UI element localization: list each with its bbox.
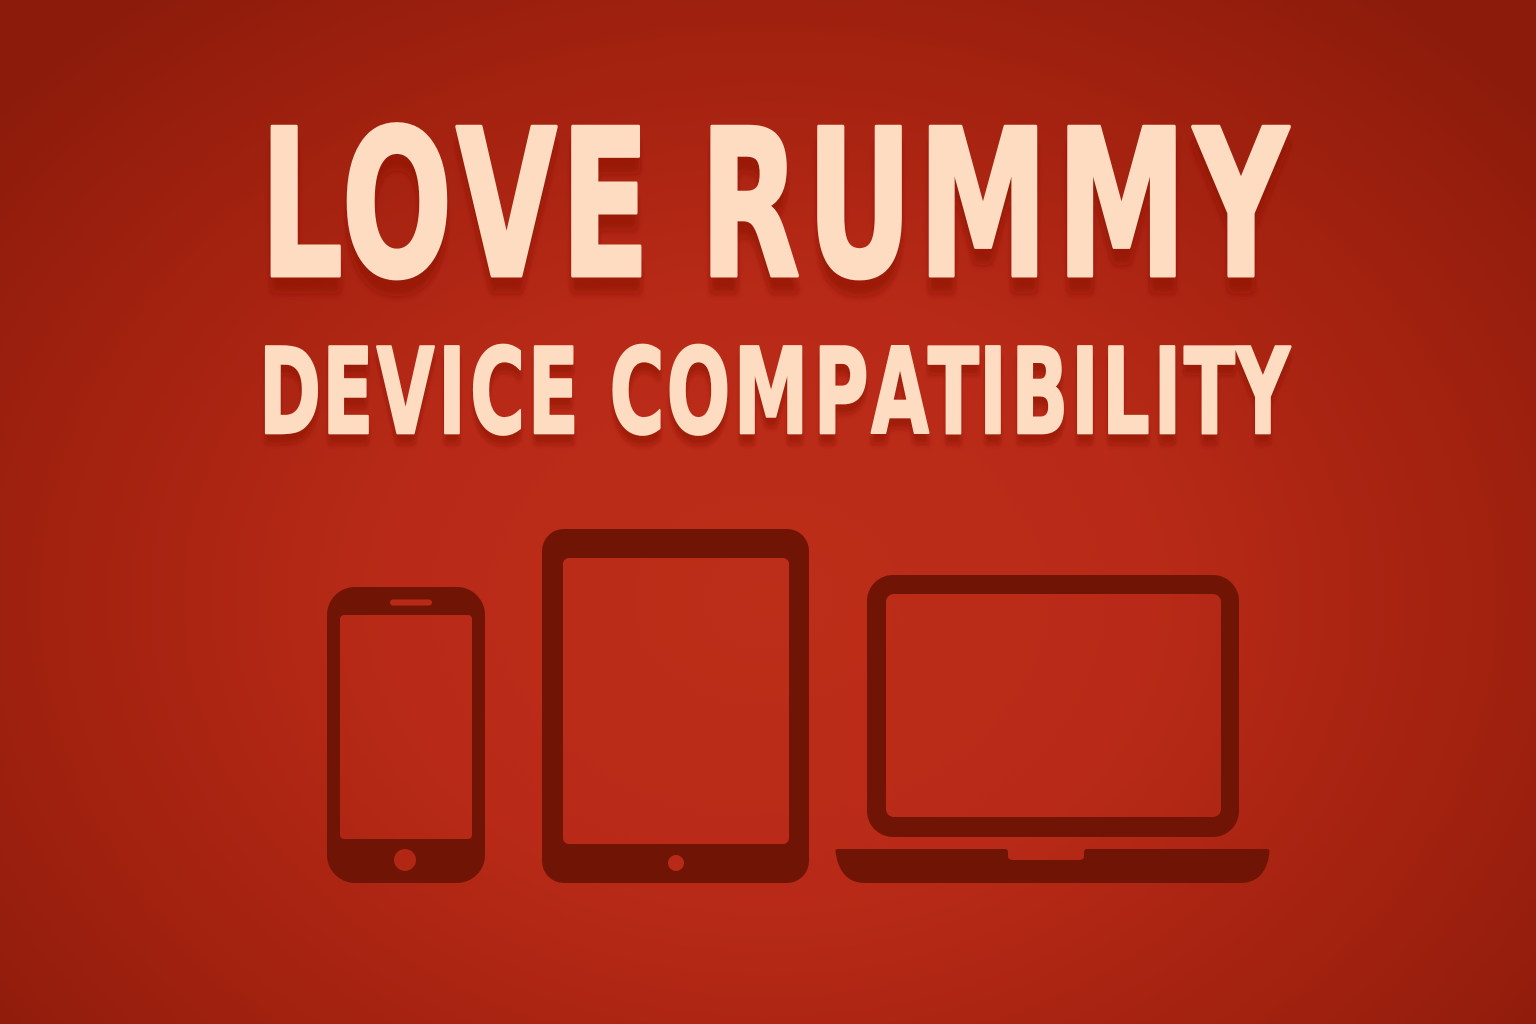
subtitle: Device Compatibility: DEVICE COMPATIBILITY (259, 324, 1291, 462)
icon: tablet (542, 529, 809, 883)
icon: laptop (835, 575, 1270, 883)
laptop base (835, 849, 1270, 883)
icon: smartphone (327, 587, 485, 883)
title: Love Rummy: LOVE RUMMY (260, 87, 1290, 324)
laptop lid (867, 575, 1239, 837)
